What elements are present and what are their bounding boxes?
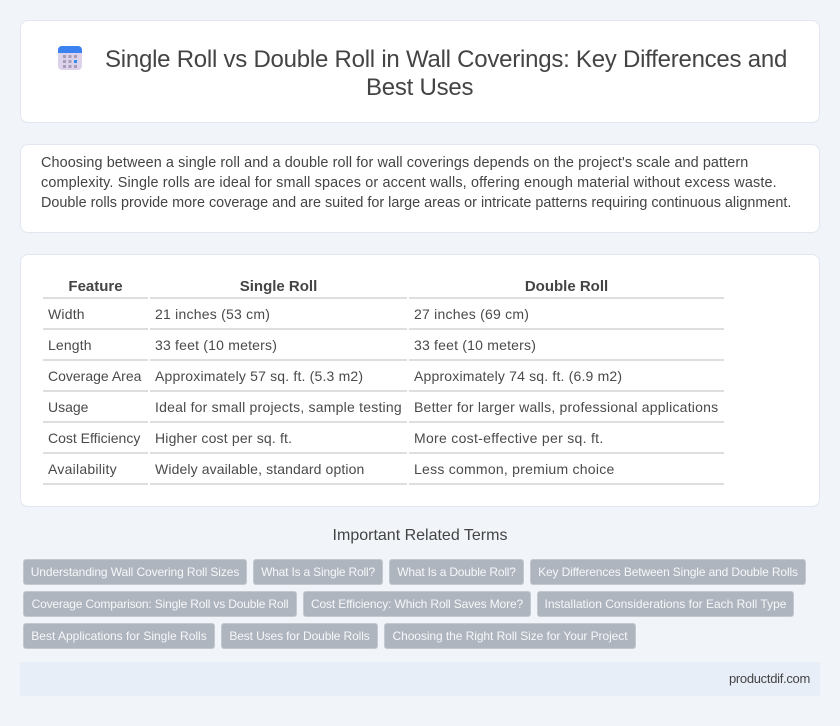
tags: Best Applications for Single Rolls bbox=[31, 629, 207, 643]
tags: Installation Considerations for Each Roll Type bbox=[545, 597, 786, 611]
comparison table: 33 feet (10 meters) bbox=[155, 337, 277, 353]
comparison table: Single Roll bbox=[240, 278, 317, 295]
comparison table: Higher cost per sq. ft. bbox=[155, 430, 292, 446]
comparison table: Feature bbox=[68, 278, 123, 295]
comparison table: More cost-effective per sq. ft. bbox=[414, 430, 604, 446]
title: Single Roll vs Double Roll in Wall Coverings: Key Differences and bbox=[105, 46, 787, 73]
comparison table: Double Roll bbox=[525, 278, 608, 295]
tags: What Is a Single Roll? bbox=[261, 565, 375, 579]
comparison table: 27 inches (69 cm) bbox=[414, 306, 529, 322]
comparison table: Cost Efficiency bbox=[48, 430, 140, 446]
panel: table card bbox=[20, 254, 820, 507]
intro text: Double rolls provide more coverage and are suited for large areas or intricate patterns requiring continuous alignment. bbox=[41, 195, 791, 211]
title bbox=[105, 46, 787, 101]
comparison table: Approximately 57 sq. ft. (5.3 m2) bbox=[155, 368, 363, 384]
intro text bbox=[41, 155, 791, 211]
tags bbox=[23, 559, 806, 649]
footer: site name: productdif.com bbox=[729, 671, 810, 686]
comparison table: Approximately 74 sq. ft. (6.9 m2) bbox=[414, 368, 622, 384]
panel: title card bbox=[20, 20, 820, 123]
comparison table: Availability bbox=[48, 461, 117, 477]
intro text: Choosing between a single roll and a double roll for wall coverings depends on the project's scale and pattern bbox=[41, 155, 748, 171]
comparison table: Length bbox=[48, 337, 92, 353]
comparison table: Ideal for small projects, sample testing bbox=[155, 399, 402, 415]
intro text: complexity. Single rolls are ideal for small spaces or accent walls, offering enough material without excess waste. bbox=[41, 175, 777, 191]
comparison table: 21 inches (53 cm) bbox=[155, 306, 270, 322]
tags: Choosing the Right Roll Size for Your Project bbox=[392, 629, 627, 643]
comparison table: Width bbox=[48, 306, 85, 322]
comparison table: 33 feet (10 meters) bbox=[414, 337, 536, 353]
comparison table: Widely available, standard option bbox=[155, 461, 364, 477]
panel: footer bbox=[20, 662, 820, 696]
tags: Cost Efficiency: Which Roll Saves More? bbox=[311, 597, 523, 611]
tags: Best Uses for Double Rolls bbox=[229, 629, 370, 643]
comparison table: Less common, premium choice bbox=[414, 461, 614, 477]
tags: Coverage Comparison: Single Roll vs Double Roll bbox=[32, 597, 288, 611]
tags: Understanding Wall Covering Roll Sizes bbox=[31, 565, 239, 579]
comparison table: Better for larger walls, professional applications bbox=[414, 399, 718, 415]
comparison table bbox=[43, 278, 724, 485]
icon: calendar bbox=[58, 46, 82, 70]
title: Best Uses bbox=[366, 74, 473, 101]
tags: Key Differences Between Single and Double Rolls bbox=[538, 565, 798, 579]
heading: related terms: Important Related Terms bbox=[333, 527, 507, 544]
tags: What Is a Double Roll? bbox=[397, 565, 516, 579]
panel: intro card bbox=[20, 144, 820, 233]
comparison table: Usage bbox=[48, 399, 88, 415]
comparison table: Coverage Area bbox=[48, 368, 141, 384]
